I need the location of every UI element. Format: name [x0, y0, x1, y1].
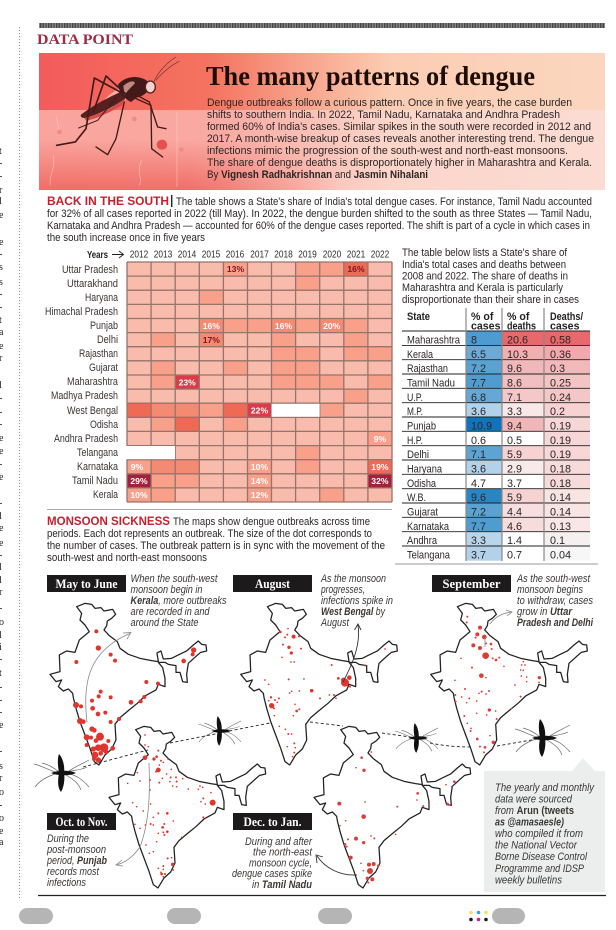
text block: monsoon sickness: The maps show dengue outbreaks across time [173, 516, 370, 528]
West Bengal dot cluster [310, 648, 386, 699]
table rows: 3.7 [507, 478, 522, 490]
table rows: 9.6 [471, 492, 486, 504]
map: May to June [47, 573, 227, 765]
year axis: 2019 [298, 250, 317, 260]
icon: mosquito left [34, 754, 89, 792]
arrow [485, 610, 512, 647]
annotation: progresses, [320, 584, 365, 596]
table rows: 7.7 [471, 521, 486, 533]
text block: monsoon sickness [47, 514, 385, 564]
annotation: monsoon cycle, [249, 858, 312, 870]
text block: table intro: Maharashtra and Kerala is particularly [402, 282, 563, 294]
table rows: Odisha [407, 478, 436, 490]
annotation: records most [47, 866, 100, 878]
table rows: 7.1 [471, 449, 486, 461]
text block: back in the south [47, 194, 592, 244]
outbreak dots [127, 734, 216, 877]
cell values [130, 264, 389, 500]
table rows: 0.14 [550, 492, 571, 504]
cell values: 23% [179, 378, 196, 388]
icon: mosquito [50, 57, 183, 187]
callout: data source note: The yearly and monthly [495, 782, 595, 794]
cell values: 17% [203, 335, 220, 345]
table rows: U.P. [407, 392, 423, 404]
state labels [45, 264, 118, 501]
table rows: 0.24 [550, 392, 571, 404]
state labels: Tamil Nadu [72, 475, 118, 487]
margin column of neighbouring text [0, 146, 4, 848]
year axis: 2022 [371, 250, 390, 260]
table rows: Karnataka [407, 521, 449, 533]
state labels: West Bengal [67, 405, 118, 417]
outbreak dots [337, 751, 456, 884]
table rows: 0.1 [550, 535, 565, 547]
state labels: Uttarakhand [67, 278, 118, 290]
map: October to November [46, 726, 266, 889]
intro text: infections mimic the progression of the south-west and north-east monsoons. [207, 145, 568, 157]
annotation: infections [47, 877, 87, 889]
intro text: shifts to southern India. In 2022, Tamil Nadu, Karnataka and Andhra Pradesh [207, 109, 560, 121]
cell values: 16% [275, 321, 292, 331]
year axis: Years [87, 250, 108, 261]
callout: data source note: data were sourced [495, 794, 573, 806]
table rows: 0.19 [550, 435, 571, 447]
state labels: Kerala [93, 489, 118, 501]
map outline [314, 726, 471, 888]
cell values: 12% [251, 490, 268, 500]
icon: mosquito centre-right [395, 723, 438, 753]
state labels: Maharashtra [67, 376, 118, 388]
table rows: 3.3 [471, 535, 486, 547]
table rows: Maharashtra [407, 334, 460, 346]
state labels: Karnataka [77, 461, 118, 473]
map outline [50, 603, 207, 765]
cell values: 14% [251, 476, 268, 486]
year axis: 2017 [250, 250, 269, 260]
table rows: 7.2 [471, 363, 486, 375]
callout: data source note: as @amasaesle) [495, 816, 564, 828]
cell values: 20% [323, 321, 341, 331]
table header: cases [550, 320, 580, 332]
panel: header banner [39, 53, 605, 190]
map outline [241, 603, 397, 765]
annotation: When the south-west [130, 573, 218, 585]
intro text: By Vignesh Radhakrishnan and Jasmin Nihalani [207, 169, 428, 181]
table rows: Delhi [407, 449, 429, 461]
state labels: Gujarat [89, 362, 118, 374]
period label: May to June [56, 576, 118, 591]
table rows: 2.9 [507, 464, 522, 476]
table rows: 6.8 [471, 392, 486, 404]
table rows: 10.9 [471, 420, 492, 432]
annotation [130, 573, 227, 629]
table header: deaths [507, 320, 536, 332]
text block: monsoon sickness: MONSOON SICKNESS [47, 514, 170, 528]
outbreak dots [454, 616, 541, 753]
state labels: Andhra Pradesh [54, 433, 118, 445]
table rows: 0.14 [550, 506, 571, 518]
cell values: 32% [371, 476, 389, 486]
share of deaths column [502, 331, 544, 532]
annotation: West Bengal by [321, 606, 385, 618]
table rows: 9.4 [507, 420, 522, 432]
annotation: to withdraw, cases [517, 595, 594, 607]
year axis: 2013 [154, 250, 173, 260]
table rows: H.P. [407, 435, 423, 447]
arrow [316, 855, 357, 875]
period label [432, 575, 511, 592]
table rows: 0.25 [550, 378, 571, 390]
table rows: Telangana [407, 550, 450, 562]
table rows: 9.6 [507, 363, 522, 375]
table rows: 20.6 [507, 334, 528, 346]
arrow [343, 624, 361, 682]
table rows: 3.6 [471, 464, 486, 476]
text block: monsoon sickness: periods. Each dot represents an outbreak. The size of the dot corresponds to [47, 528, 372, 540]
table rows: Gujarat [407, 506, 438, 518]
table rows: 0.19 [550, 420, 571, 432]
table rows: 10.3 [507, 349, 528, 361]
table rows: 3.3 [507, 406, 522, 418]
state labels: Haryana [85, 292, 118, 304]
map: December to January [232, 726, 471, 891]
heatmap cells [126, 262, 392, 502]
table header: % of [507, 311, 530, 323]
cell values: 19% [371, 462, 389, 472]
table rows: 8.6 [507, 378, 522, 390]
table rows: 3.7 [471, 550, 486, 562]
table rows: Rajasthan [407, 363, 448, 375]
annotation: dengue cases spike [232, 868, 312, 880]
year axis: 2015 [202, 250, 221, 260]
table rows: 6.5 [471, 349, 486, 361]
annotation: During the [47, 833, 89, 845]
cell values: 10% [130, 490, 148, 500]
state labels: Punjab [90, 320, 118, 332]
state labels: Rajasthan [79, 348, 118, 360]
callout: data source note: weekly bulletins [495, 874, 563, 886]
annotation: Kerala, more outbreaks [130, 595, 227, 607]
annotation: monsoon begins [517, 584, 583, 596]
annotation: Pradesh and Delhi [517, 617, 594, 629]
year axis: 2012 [130, 250, 149, 260]
table rows: 7.2 [471, 506, 486, 518]
table rows: Tamil Nadu [407, 378, 455, 390]
annotation: post-monsoon [46, 844, 106, 856]
arrow [116, 763, 149, 866]
table rows: 3.6 [471, 406, 486, 418]
annotation: are recorded in and [130, 606, 210, 618]
year axis: 2014 [178, 250, 197, 260]
text block: back in the south: the south increase once in five years [47, 232, 205, 244]
state labels: Uttar Pradesh [62, 264, 118, 276]
annotation: As the monsoon [320, 573, 386, 585]
state labels: Madhya Pradesh [51, 390, 118, 402]
year axis: 2018 [274, 250, 293, 260]
table rows: M.P. [407, 406, 423, 418]
print registration marks [19, 908, 525, 924]
period label: September [442, 576, 501, 591]
icon: mosquito right [515, 719, 570, 757]
table rows: 0.13 [550, 521, 571, 533]
callout: data source note: the National Vector [495, 840, 577, 852]
table rows: 0.58 [550, 334, 571, 346]
share of cases column [466, 331, 502, 561]
table rows: 0.5 [507, 435, 522, 447]
intro text [207, 97, 594, 181]
table rows: 0.7 [507, 550, 522, 562]
table rows: Kerala [407, 349, 433, 361]
title: The many patterns of dengue [206, 60, 535, 91]
annotation [46, 833, 107, 889]
dashed mosquito flight path [83, 722, 543, 767]
table rows: 0.18 [550, 478, 571, 490]
callout: data source note: Programme and IDSP [495, 863, 585, 875]
table rows: Haryana [407, 464, 442, 476]
table rows: 7.7 [471, 378, 486, 390]
year axis: 2016 [226, 250, 245, 260]
cell values: 13% [227, 264, 244, 274]
map outline [109, 726, 266, 888]
map: August [233, 573, 397, 765]
text block: table intro [402, 247, 579, 306]
intro text: Dengue outbreaks follow a curious pattern. Once in five years, the case burden [207, 97, 572, 109]
annotation: grow in Uttar [517, 606, 573, 618]
table rows: 0.18 [550, 464, 571, 476]
table rows: 0.2 [550, 406, 565, 418]
table header: State [407, 311, 430, 323]
period label: Dec. to Jan. [244, 814, 302, 829]
table rows: Andhra [407, 535, 437, 547]
annotation: around the State [130, 617, 198, 629]
annotation: As the south-west [516, 573, 591, 585]
section label: data point: DATA POINT [37, 32, 133, 48]
cell values: 9% [131, 462, 144, 472]
intro text: formed 60% of India's cases. Similar spikes in the south were recorded in 2012 and [207, 121, 591, 133]
period label: August [255, 576, 291, 591]
period label: Oct. to Nov. [56, 814, 108, 829]
table rows: 0.36 [550, 349, 571, 361]
table rows: 0.6 [471, 435, 486, 447]
table rows [407, 334, 571, 562]
map: September [431, 573, 594, 765]
cell values: 22% [251, 406, 268, 416]
cell values: 9% [374, 434, 386, 444]
map outline [431, 603, 587, 765]
table rows: 0.04 [550, 550, 571, 562]
state labels: Himachal Pradesh [45, 306, 118, 318]
table rows: 4.6 [507, 521, 522, 533]
text block: monsoon sickness: the number of cases. The outbreak pattern is in sync with the movement of the [47, 540, 385, 552]
annotation: August [320, 617, 350, 629]
text block: table intro: India's total cases and deaths between [402, 259, 566, 271]
state labels: Odisha [90, 419, 118, 431]
annotation [320, 573, 393, 629]
outbreak dots [73, 629, 196, 763]
year axis: 2021 [347, 250, 366, 260]
state labels: Delhi [97, 334, 118, 346]
annotation: infections spike in [321, 595, 393, 607]
table rows: 1.4 [507, 535, 522, 547]
table rows: 4.7 [471, 478, 486, 490]
cell values: 16% [203, 321, 220, 331]
annotation [232, 836, 313, 891]
arrow [86, 632, 131, 722]
table header: % of [471, 311, 494, 323]
table rows: 5.9 [507, 492, 522, 504]
annotation: the north-east [253, 846, 313, 858]
text block: table intro: The table below lists a State's share of [402, 247, 568, 259]
cell values: 29% [130, 476, 148, 486]
annotation: During and after [245, 836, 312, 848]
annotation: monsoon begin in [130, 584, 202, 596]
text block: table intro: 2008 and 2022. The share of deaths in [402, 270, 568, 282]
table rows: 7.1 [507, 392, 522, 404]
table rows: Punjab [407, 420, 436, 432]
table header: cases [471, 320, 501, 332]
year axis [87, 250, 390, 261]
text block: monsoon sickness: south-west and north-east monsoons [47, 552, 207, 564]
table: share of cases and deaths [402, 308, 590, 562]
callout: data source note: from Arun (tweets [495, 805, 574, 817]
cell values: 10% [251, 462, 268, 472]
table rows: 0.3 [550, 363, 565, 375]
annotation: in Tamil Nadu [252, 879, 312, 891]
callout: data source note: Borne Disease Control [495, 851, 588, 863]
table rows: 4.4 [507, 506, 522, 518]
callout: data source note [484, 758, 605, 892]
table header [407, 311, 583, 332]
annotation: period, Punjab [46, 855, 107, 867]
table header: Deaths/ [550, 311, 583, 323]
outbreak dots [264, 628, 313, 757]
table rows: 0.19 [550, 449, 571, 461]
period label [233, 575, 312, 592]
text block: table intro: disproportionate than their share in cases [402, 294, 579, 306]
year axis: 2020 [323, 250, 342, 260]
icon: mosquito centre-left [198, 716, 241, 746]
table rows: 5.9 [507, 449, 522, 461]
cell values: 16% [347, 264, 365, 274]
deaths to cases column [544, 331, 590, 561]
chart: state share heatmap [45, 250, 392, 502]
table rows: W.B. [407, 492, 426, 504]
text block: back in the south: BACK IN THE SOUTH [47, 194, 169, 208]
state labels: Telangana [77, 447, 118, 459]
callout: data source note: who compiled it from [495, 828, 583, 840]
annotation [516, 573, 594, 629]
table rows: 8 [471, 334, 477, 346]
